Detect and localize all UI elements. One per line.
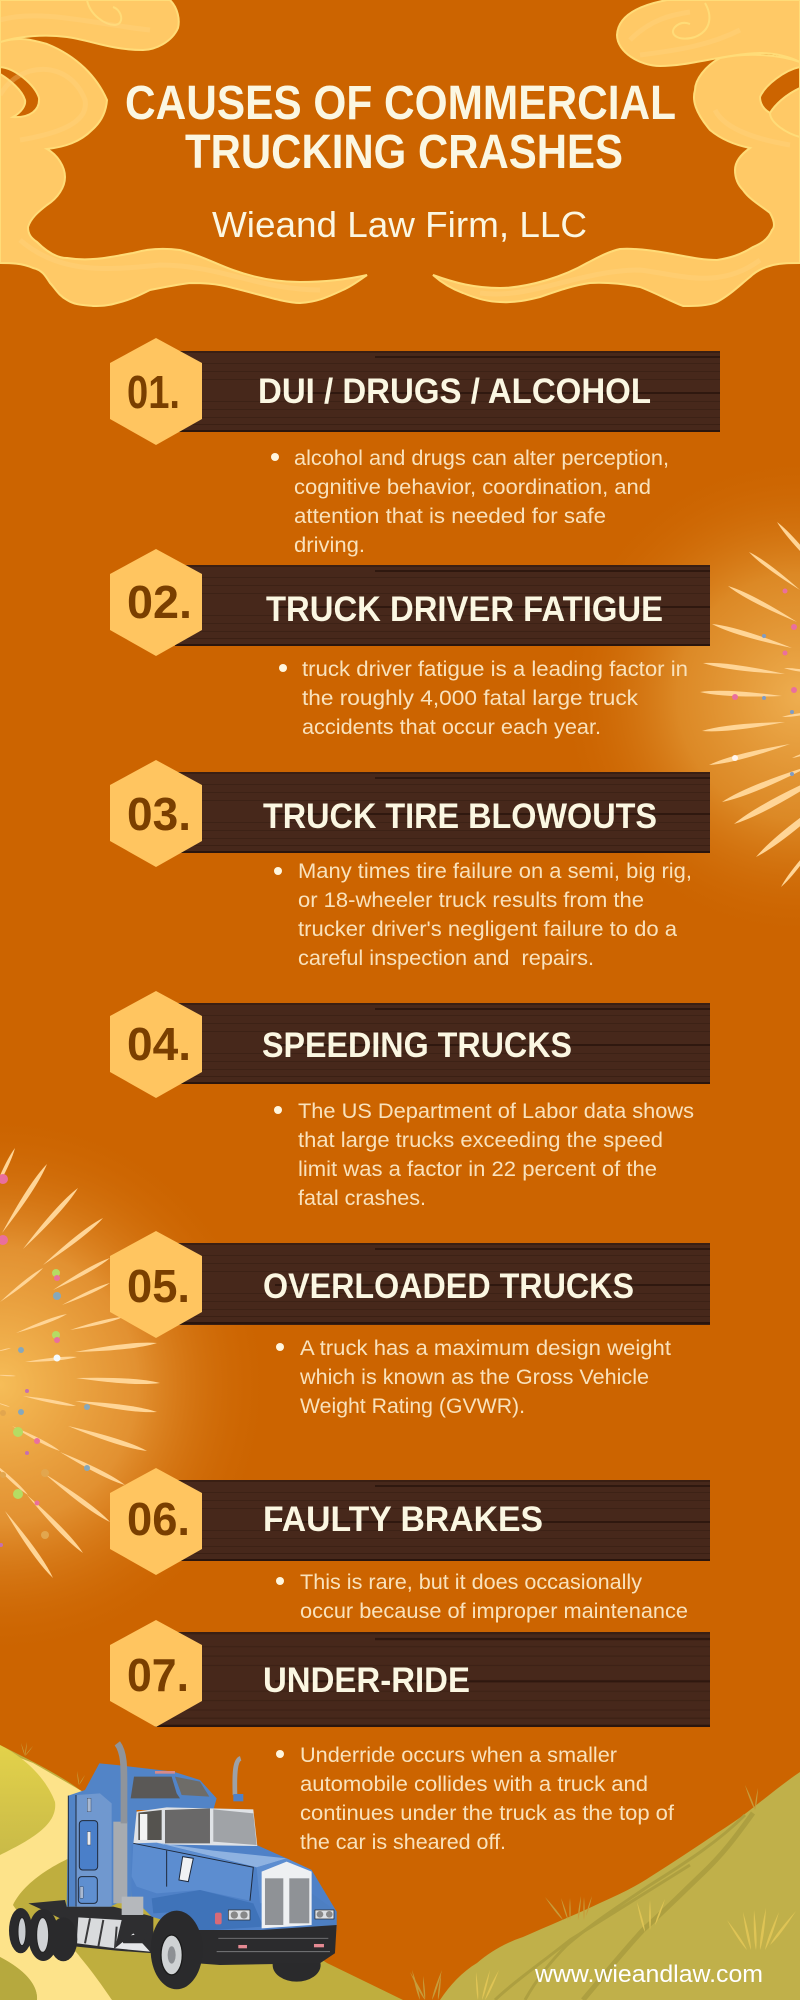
heading 03: TRUCK TIRE BLOWOUTS [263, 797, 657, 836]
body text 03: or 18-wheeler truck results from the [298, 889, 644, 912]
body text 03: trucker driver's negligent failure to do a [298, 918, 677, 941]
number badge 03: 03. [127, 788, 191, 840]
smoke swirl: top right [433, 0, 800, 306]
section 03 [110, 760, 710, 970]
heading 02: TRUCK DRIVER FATIGUE [266, 590, 663, 629]
body text 05 [276, 1337, 671, 1418]
body text 06: occur because of improper maintenance [300, 1600, 688, 1623]
bottom right hill [409, 1772, 800, 2000]
body text 04: The US Department of Labor data shows [298, 1100, 694, 1123]
number badge 04 [110, 991, 202, 1098]
bottom left hill [0, 1742, 403, 2000]
body text 07 [276, 1744, 674, 1854]
truck illustration [9, 1743, 337, 1989]
heading 05: OVERLOADED TRUCKS [263, 1267, 634, 1306]
heading bar 01 [175, 351, 720, 432]
body text 07: continues under the truck as the top of [300, 1802, 674, 1825]
section 04 [110, 991, 710, 1210]
heading bar 03 [175, 772, 710, 853]
number badge 01 [110, 338, 202, 445]
heading 06: FAULTY BRAKES [263, 1500, 543, 1539]
number badge 02 [110, 549, 202, 656]
number badge 03 [110, 760, 202, 867]
section 02 [110, 549, 710, 739]
body text 03: careful inspection and repairs. [298, 947, 594, 970]
title [125, 77, 676, 179]
body text 01 [271, 447, 669, 557]
section 05 [110, 1231, 710, 1418]
number badge 01: 01. [127, 366, 180, 418]
title: TRUCKING CRASHES [185, 126, 623, 179]
body text 02: truck driver fatigue is a leading factor in [302, 658, 688, 681]
body text 07: automobile collides with a truck and [300, 1773, 648, 1796]
body text 02: the roughly 4,000 fatal large truck [302, 687, 639, 710]
body text 01: cognitive behavior, coordination, and [294, 476, 651, 499]
section 07 [110, 1620, 710, 1854]
body text 04: that large trucks exceeding the speed [298, 1129, 663, 1152]
number badge 07: 07. [127, 1649, 189, 1701]
title: CAUSES OF COMMERCIAL [125, 77, 676, 130]
body text 05: which is known as the Gross Vehicle [299, 1366, 649, 1389]
section 06 [110, 1468, 710, 1623]
body text 04: limit was a factor in 22 percent of the [298, 1158, 657, 1181]
body text 06 [276, 1571, 688, 1623]
heading bar 04 [175, 1003, 710, 1084]
body text 02 [279, 658, 688, 739]
body text 06: This is rare, but it does occasionally [300, 1571, 643, 1594]
heading bar 06 [175, 1480, 710, 1561]
heading bar 02 [175, 565, 710, 646]
heading bar 05 [175, 1243, 710, 1325]
heading bar 07 [155, 1632, 710, 1727]
left firework burst [0, 1110, 275, 1660]
body text 03: Many times tire failure on a semi, big rig, [298, 860, 692, 883]
number badge 02: 02. [127, 576, 192, 628]
body text 05: Weight Rating (GVWR). [300, 1395, 525, 1418]
body text 03 [274, 860, 692, 970]
body text 01: attention that is needed for safe [294, 505, 606, 528]
body text 01: driving. [294, 534, 365, 557]
number badge 05: 05. [127, 1260, 190, 1312]
subtitle: Wieand Law Firm, LLC [212, 204, 587, 245]
body text 02: accidents that occur each year. [302, 716, 601, 739]
right firework burst [555, 452, 800, 942]
number badge 04: 04. [127, 1018, 191, 1070]
body text 07: Underride occurs when a smaller [300, 1744, 617, 1767]
number badge 06: 06. [127, 1493, 190, 1545]
body text 04: fatal crashes. [298, 1187, 426, 1210]
heading 01: DUI / DRUGS / ALCOHOL [258, 372, 651, 411]
number badge 07 [110, 1620, 202, 1727]
number badge 05 [110, 1231, 202, 1338]
body text 04 [274, 1100, 694, 1210]
body text 01: alcohol and drugs can alter perception, [294, 447, 669, 470]
smoke swirl: top left [0, 0, 367, 306]
website url: www.wieandlaw.com [534, 1961, 763, 1988]
number badge 06 [110, 1468, 202, 1575]
heading 07: UNDER-RIDE [263, 1661, 470, 1700]
body text 07: the car is sheared off. [300, 1831, 506, 1854]
section 01 [110, 338, 720, 557]
heading 04: SPEEDING TRUCKS [262, 1026, 572, 1065]
body text 05: A truck has a maximum design weight [300, 1337, 671, 1360]
